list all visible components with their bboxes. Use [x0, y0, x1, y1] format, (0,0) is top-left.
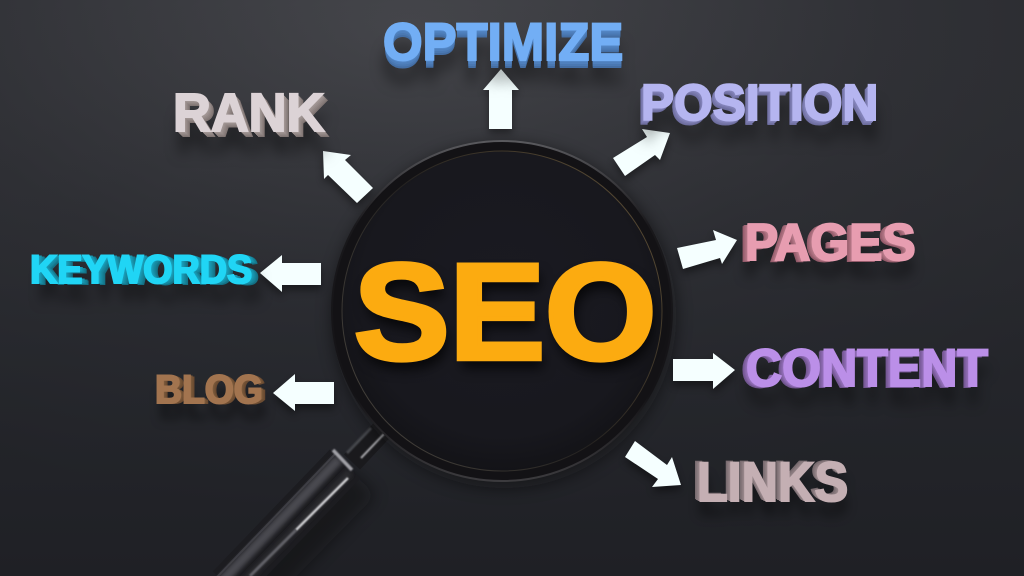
- icon: magnifying glass lens: [332, 141, 676, 488]
- label: BLOG: BLOG: [155, 368, 263, 412]
- arrow: to pages: [677, 230, 737, 274]
- label: POSITION: POSITION: [641, 74, 878, 131]
- arrow: to optimize: [483, 69, 519, 133]
- arrow: to rank: [323, 151, 373, 208]
- arrow: to keywords: [260, 255, 321, 297]
- icon: magnifying glass handle: [216, 428, 384, 576]
- arrow: to position: [613, 129, 670, 181]
- arrow: to blog: [273, 374, 334, 416]
- arrow: to content: [673, 353, 735, 394]
- label: PAGES: PAGES: [745, 214, 916, 272]
- label: CONTENT: CONTENT: [746, 339, 988, 398]
- title: SEO: SEO: [354, 236, 656, 388]
- label: RANK: RANK: [173, 83, 324, 143]
- label: OPTIMIZE: OPTIMIZE: [383, 13, 623, 72]
- label: KEYWORDS: KEYWORDS: [30, 248, 252, 292]
- arrow: to links: [625, 441, 681, 492]
- label: LINKS: LINKS: [697, 450, 848, 513]
